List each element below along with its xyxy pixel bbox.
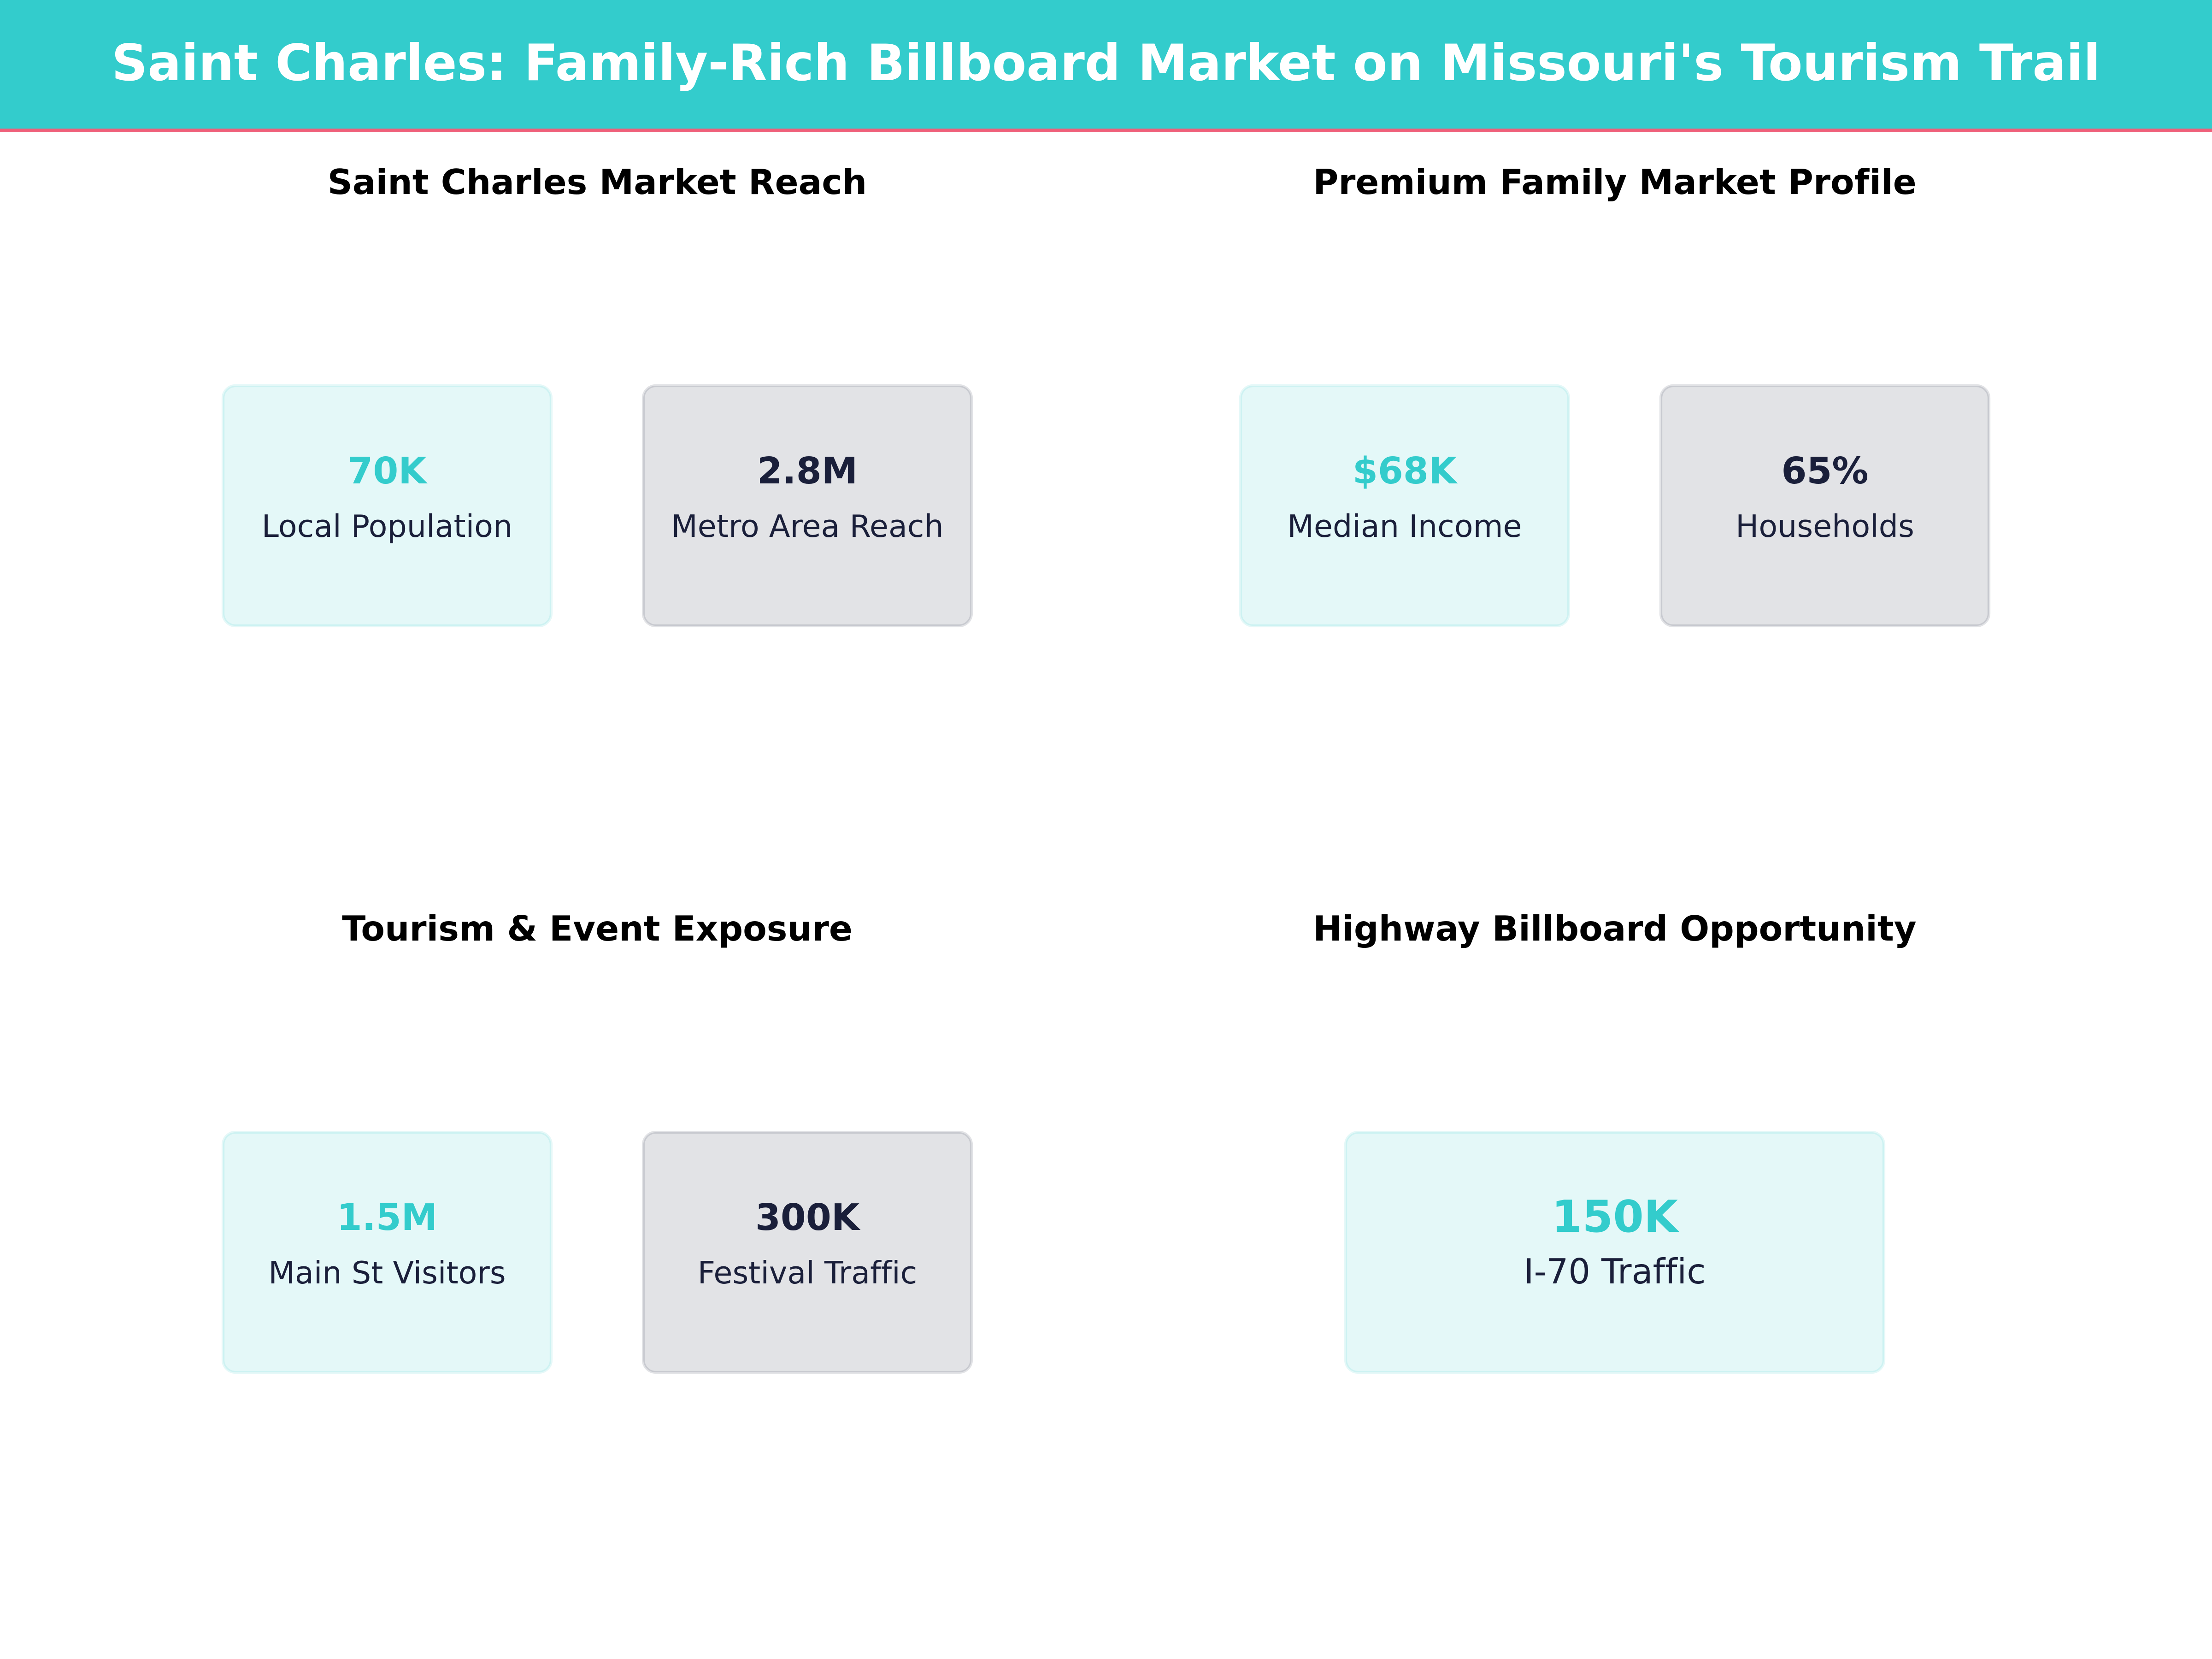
- heading: family market profile: Premium Family Market Profile: [1313, 162, 1917, 202]
- card: i-70 traffic: I-70 Traffic: [1524, 1251, 1706, 1292]
- card: festival traffic: [643, 1132, 971, 1372]
- card: festival traffic: Festival Traffic: [698, 1255, 917, 1291]
- card: main st visitors: [223, 1132, 551, 1372]
- card: i-70 traffic: 150K: [1552, 1191, 1680, 1242]
- panel: highway billboard opportunity: [1313, 908, 1917, 1372]
- panel: family market profile: [1241, 162, 1989, 626]
- panel: market reach: [223, 162, 971, 626]
- card: local population: 70K: [347, 450, 428, 492]
- card: i-70 traffic: [1346, 1132, 1884, 1372]
- card: median income: $68K: [1353, 450, 1458, 492]
- heading: market reach: Saint Charles Market Reach: [328, 162, 867, 202]
- card: metro area reach: Metro Area Reach: [671, 508, 944, 544]
- card: metro area reach: [643, 386, 971, 626]
- title: Saint Charles: Family-Rich Billboard Market on Missouri's Tourism Trail: [112, 34, 2100, 92]
- card: households: Households: [1735, 508, 1914, 544]
- heading: tourism and event exposure: Tourism & Event Exposure: [342, 908, 853, 949]
- card: households: [1661, 386, 1989, 626]
- card: metro area reach: 2.8M: [757, 450, 858, 492]
- card: local population: [223, 386, 551, 626]
- panel: tourism and event exposure: [223, 908, 971, 1372]
- heading: highway billboard opportunity: Highway Billboard Opportunity: [1313, 908, 1917, 949]
- card: median income: Median Income: [1287, 508, 1522, 544]
- header banner: [0, 0, 2212, 132]
- card: households: 65%: [1781, 450, 1869, 492]
- card: main st visitors: 1.5M: [337, 1196, 437, 1239]
- card: main st visitors: Main St Visitors: [268, 1255, 506, 1291]
- card: local population: Local Population: [262, 508, 512, 544]
- card: festival traffic: 300K: [755, 1196, 861, 1239]
- card: median income: [1241, 386, 1569, 626]
